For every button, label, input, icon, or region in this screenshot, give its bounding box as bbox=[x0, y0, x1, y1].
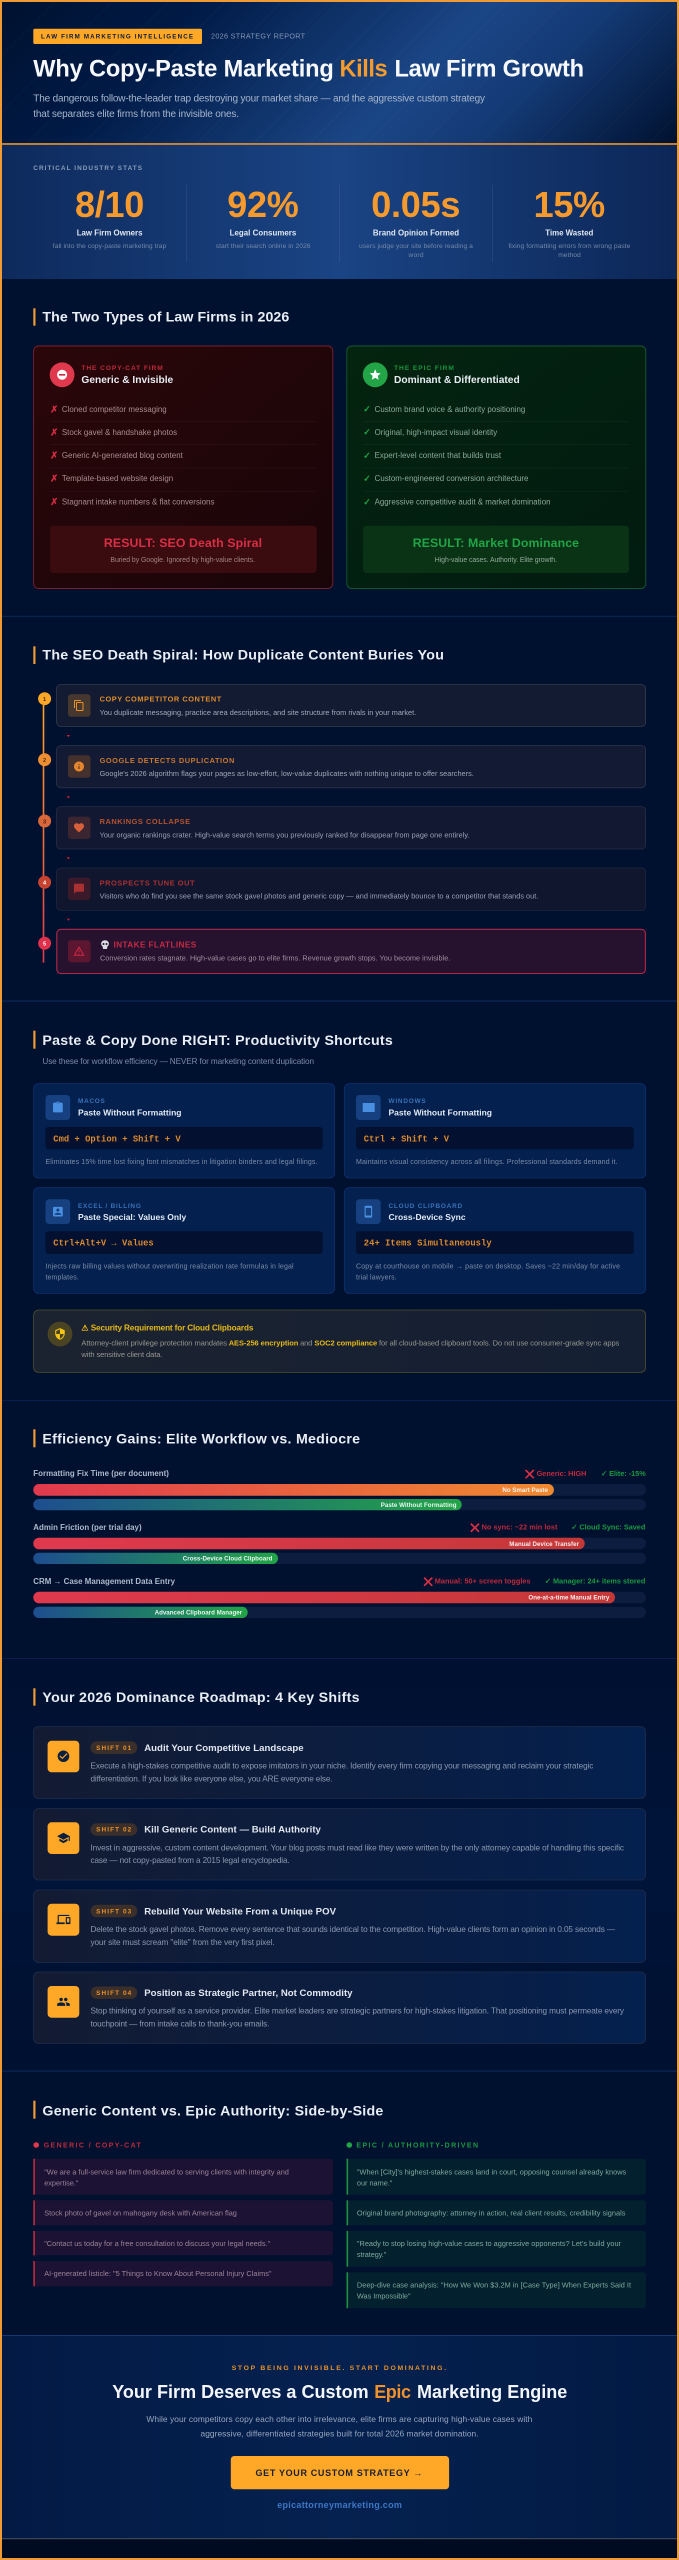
subtitle bbox=[33, 94, 485, 120]
bar chart: admin friction: ✓ Cloud Sync: Saved bbox=[571, 1523, 645, 1532]
stat: 0.05s bbox=[359, 184, 473, 259]
bar chart: crm entry: CRM → Case Management Data Entry bbox=[33, 1577, 176, 1586]
step marker 5 bbox=[38, 937, 51, 950]
epic copy examples: Original brand photography: attorney in action, real client results, credibility signals bbox=[357, 2208, 626, 2217]
bar chart: formatting fix: ✓ Elite: -15% bbox=[601, 1469, 646, 1478]
step 3: rankings collapse: RANKINGS COLLAPSE bbox=[100, 817, 190, 826]
heading: two types: The Two Types of Law Firms in 2026 bbox=[42, 310, 289, 326]
step 5: intake flatlines: INTAKE FLATLINES bbox=[114, 941, 197, 950]
section note: Use these for workflow efficiency — NEVER for marketing content duplication bbox=[42, 1057, 314, 1066]
shift 02: Invest in aggressive, custom content development. Your blog posts must read like they were written by the only attorney capable of handling this specific bbox=[90, 1844, 624, 1852]
failure list: Stagnant intake numbers & flat conversions bbox=[62, 498, 214, 506]
panel: epic firm bbox=[347, 346, 646, 588]
icon: copy bbox=[74, 700, 84, 711]
strength list: ✓ bbox=[363, 497, 371, 507]
stat: 0.05s: 0.05s bbox=[371, 184, 460, 225]
title: Kills bbox=[340, 56, 388, 82]
bar chart: crm entry: One-at-a-time Manual Entry bbox=[528, 1595, 610, 1602]
icon: check circle bbox=[58, 1750, 69, 1762]
bar chart: crm entry bbox=[33, 1576, 646, 1618]
shift 03: Delete the stock gavel photos. Remove every sentence that sounds identical to the competition. High-value clients form an opinion in 0.05 seconds — bbox=[90, 1925, 616, 1934]
failure list bbox=[50, 404, 317, 508]
title bbox=[33, 56, 584, 82]
icon: star bbox=[363, 362, 388, 387]
card: macos: Cmd + Option + Shift + V bbox=[53, 1134, 181, 1144]
icon: clipboard bbox=[53, 1102, 63, 1112]
step 2: google detects: Google's 2026 algorithm flags your pages as low-effort, low-value duplicates with nothing unique to offer searchers. bbox=[100, 769, 474, 778]
strength list: ✓ bbox=[363, 474, 371, 484]
security callout: AES-256 encryption bbox=[229, 1338, 299, 1347]
stat: 15%: 15% bbox=[534, 184, 605, 225]
arrow bbox=[67, 735, 70, 737]
panel: copy-cat firm bbox=[34, 346, 333, 588]
security callout bbox=[34, 1310, 646, 1372]
column: generic bbox=[33, 2142, 333, 2286]
step marker 4 bbox=[38, 876, 51, 889]
timeline bbox=[38, 692, 51, 963]
card: cloud clipboard bbox=[344, 1188, 646, 1293]
epic copy examples: "When [City]'s highest-stakes cases land in court, opposing counsel already knows bbox=[357, 2167, 627, 2176]
epic copy examples: Deep-dive case analysis: "How We Won $3.2M in [Case Type] When Experts Said It bbox=[357, 2280, 631, 2289]
shift 04: SHIFT 04 bbox=[96, 1990, 132, 1997]
failure list: ✗ bbox=[50, 474, 58, 485]
icon: warning bbox=[74, 946, 84, 956]
stat: 8/10 bbox=[53, 184, 167, 250]
security callout: Attorney-client privilege protection mandates bbox=[81, 1338, 227, 1347]
shift 03: Rebuild Your Website From a Unique POV bbox=[144, 1906, 337, 1917]
card: windows: WINDOWS bbox=[388, 1098, 426, 1105]
security callout: SOC2 compliance bbox=[314, 1338, 377, 1347]
step 5: intake flatlines bbox=[57, 929, 645, 974]
column: epic: EPIC / AUTHORITY-DRIVEN bbox=[356, 2143, 478, 2150]
shift 01: differentiation. If you look like everyone else, you ARE everyone else. bbox=[90, 1774, 333, 1784]
step 4: prospects tune out: Visitors who do find you see the same stock gavel photos and generic copy — and immediately bounce to a competitor that stands out. bbox=[100, 891, 538, 900]
badge bbox=[33, 29, 202, 44]
icon: cross bbox=[424, 1578, 432, 1586]
result: SEO death spiral bbox=[50, 526, 317, 573]
icon: shield bbox=[48, 1322, 72, 1346]
stat: 0.05s: word bbox=[407, 252, 424, 259]
stat: 8/10: fall into the copy-paste marketing trap bbox=[53, 243, 167, 250]
result: SEO death spiral: RESULT: SEO Death Spiral bbox=[104, 536, 262, 550]
shift 04: Stop thinking of yourself as a service provider. Elite market leaders are strategic partners for high-stakes litigation. That positioning must permeate every bbox=[90, 2007, 625, 2016]
stat: 8/10: 8/10 bbox=[75, 184, 144, 225]
icon: skull bbox=[101, 940, 109, 949]
arrow bbox=[67, 919, 70, 921]
stat: 92%: Legal Consumers bbox=[230, 229, 297, 238]
eyebrow: STOP BEING INVISIBLE. START DOMINATING. bbox=[232, 2365, 446, 2372]
step 2: google detects: GOOGLE DETECTS DUPLICATION bbox=[100, 756, 234, 765]
button: GET YOUR CUSTOM STRATEGY → bbox=[256, 2468, 422, 2478]
arrow bbox=[67, 857, 70, 860]
heading: efficiency: Efficiency Gains: Elite Workflow vs. Mediocre bbox=[42, 1432, 360, 1448]
card: excel bbox=[34, 1188, 335, 1293]
security callout: and bbox=[300, 1338, 312, 1347]
step marker 2 bbox=[38, 753, 51, 766]
generic copy examples: expertise." bbox=[44, 2178, 79, 2188]
security callout: for all cloud-based clipboard tools. Do not use consumer-grade sync apps bbox=[379, 1338, 620, 1347]
icon: graduation cap bbox=[57, 1833, 70, 1843]
icon: window bbox=[363, 1103, 375, 1112]
strength list: Aggressive competitive audit & market domination bbox=[375, 498, 550, 506]
shift 01 bbox=[34, 1727, 646, 1798]
shift 03 bbox=[34, 1890, 646, 1962]
shift 02: SHIFT 02 bbox=[96, 1827, 132, 1834]
strength list: Custom brand voice & authority positioning bbox=[375, 405, 525, 414]
strength list bbox=[363, 404, 629, 507]
failure list: ✗ bbox=[50, 404, 58, 415]
firm label: THE COPY-CAT FIRM bbox=[81, 365, 163, 372]
step 1: copy competitor: COPY COMPETITOR CONTENT bbox=[100, 695, 222, 704]
result: SEO death spiral: Buried by Google. Ignored by high-value clients. bbox=[110, 557, 255, 564]
failure list: Cloned competitor messaging bbox=[62, 405, 167, 414]
failure list: Generic AI-generated blog content bbox=[62, 451, 184, 460]
card: macos: Eliminates 15% time lost fixing font mismatches in litigation binders and legal filings. bbox=[46, 1159, 318, 1166]
shift 01: Audit Your Competitive Landscape bbox=[144, 1743, 304, 1754]
epic copy examples: strategy." bbox=[357, 2250, 387, 2259]
step 4: prospects tune out bbox=[57, 868, 646, 910]
step marker 3: 3 bbox=[43, 819, 46, 825]
stat: 92%: 92% bbox=[227, 184, 299, 225]
step marker 3 bbox=[38, 814, 51, 828]
firm name: Dominant & Differentiated bbox=[394, 375, 520, 386]
card: excel: Ctrl+Alt+V → Values bbox=[53, 1238, 154, 1248]
icon: contact box bbox=[53, 1207, 63, 1217]
stat: 0.05s: users judge your site before reading a bbox=[359, 243, 473, 250]
failure list: Template-based website design bbox=[62, 474, 173, 483]
epic copy examples: our name." bbox=[357, 2178, 393, 2188]
generic copy examples bbox=[44, 2167, 289, 2278]
stat: 15%: method bbox=[558, 252, 581, 259]
icon: cross bbox=[526, 1470, 534, 1478]
strength list: Expert-level content that builds trust bbox=[375, 451, 502, 460]
bar chart: formatting fix bbox=[33, 1469, 646, 1510]
bar chart: formatting fix: No Smart Paste bbox=[502, 1487, 548, 1494]
stat: 0.05s: Brand Opinion Formed bbox=[373, 229, 459, 238]
generic copy examples: "Contact us today for a free consultation to discuss your legal needs." bbox=[44, 2239, 271, 2248]
hero header bbox=[0, 0, 679, 145]
firm name: Generic & Invisible bbox=[81, 375, 174, 386]
bar chart: crm entry: Advanced Clipboard Manager bbox=[155, 1610, 243, 1617]
website link: epicattorneymarketing.com bbox=[277, 2500, 402, 2510]
bar chart: crm entry: Manual: 50+ screen toggles bbox=[435, 1576, 530, 1585]
heading: side by side: Generic Content vs. Epic Authority: Side-by-Side bbox=[42, 2103, 383, 2119]
headline: Marketing Engine bbox=[417, 2382, 567, 2402]
headline bbox=[112, 2382, 567, 2402]
column: generic: GENERIC / COPY-CAT bbox=[44, 2143, 142, 2150]
security callout: ⚠ Security Requirement for Cloud Clipboards bbox=[81, 1324, 254, 1332]
failure list: Stock gavel & handshake photos bbox=[62, 428, 177, 437]
result: market dominance bbox=[363, 526, 629, 573]
shift 03: SHIFT 03 bbox=[96, 1908, 132, 1915]
icon: no entry bbox=[50, 362, 74, 387]
epic copy examples: "Ready to stop losing high-value cases to aggressive opponents? Let's build your bbox=[357, 2239, 622, 2248]
step 5: intake flatlines: Conversion rates stagnate. High-value cases go to elite firms. Revenue growth stops. You become invisible. bbox=[100, 953, 450, 962]
stat: 8/10: Law Firm Owners bbox=[77, 229, 143, 238]
security callout: with sensitive client data. bbox=[80, 1350, 162, 1359]
paragraph bbox=[146, 2414, 533, 2439]
subtitle: The dangerous follow-the-leader trap destroying your market share — and the aggressive custom strategy bbox=[33, 94, 485, 104]
heading: shortcuts bbox=[33, 1031, 393, 1066]
report tag: 2026 STRATEGY REPORT bbox=[211, 32, 306, 40]
bar chart: admin friction: Admin Friction (per trial day) bbox=[33, 1523, 142, 1532]
subtitle: that separates elite firms from the invisible ones. bbox=[33, 109, 239, 120]
heading: shortcuts: Paste & Copy Done RIGHT: Productivity Shortcuts bbox=[42, 1033, 393, 1049]
arrow bbox=[67, 796, 70, 798]
failure list: ✗ bbox=[50, 497, 58, 508]
headline: Epic bbox=[374, 2382, 411, 2402]
card: macos: Paste Without Formatting bbox=[78, 1108, 182, 1118]
icon: people bbox=[57, 1998, 70, 2006]
bar chart: admin friction: Manual Device Transfer bbox=[509, 1541, 580, 1548]
call to action bbox=[0, 2335, 679, 2539]
step marker 4: 4 bbox=[43, 881, 47, 887]
step marker 2: 2 bbox=[43, 758, 46, 764]
card: macos: MACOS bbox=[78, 1098, 106, 1105]
title: Why Copy-Paste Marketing bbox=[33, 56, 334, 82]
card: windows: Ctrl + Shift + V bbox=[364, 1134, 450, 1144]
card: cloud clipboard: Cross-Device Sync bbox=[388, 1212, 466, 1222]
card: cloud clipboard: Copy at courthouse on mobile → paste on desktop. Saves ~22 min/day for active bbox=[356, 1263, 620, 1270]
card: cloud clipboard: trial lawyers. bbox=[356, 1274, 397, 1282]
bar chart: crm entry: ✓ Manager: 24+ items stored bbox=[545, 1576, 645, 1585]
step 2: google detects bbox=[57, 746, 646, 788]
card: windows bbox=[344, 1084, 646, 1178]
step 1: copy competitor: You duplicate messaging, practice area descriptions, and site structure from rivals in your market. bbox=[100, 708, 416, 717]
icon: cross bbox=[471, 1524, 479, 1532]
bar chart: admin friction: Cross-Device Cloud Clipboard bbox=[183, 1556, 273, 1563]
stats band bbox=[0, 145, 679, 279]
step marker 5: 5 bbox=[43, 942, 46, 948]
roadmap background bbox=[0, 1658, 679, 2070]
footer strip bbox=[0, 2539, 679, 2560]
strength list: Original, high-impact visual identity bbox=[375, 428, 497, 437]
bar chart: formatting fix: Formatting Fix Time (per document) bbox=[33, 1469, 169, 1478]
stats heading: CRITICAL INDUSTRY STATS bbox=[33, 165, 143, 172]
shift 02: Kill Generic Content — Build Authority bbox=[144, 1825, 322, 1836]
paragraph: aggressive, differentiated strategies built for total 2026 market domination. bbox=[200, 2429, 479, 2439]
card: cloud clipboard: CLOUD CLIPBOARD bbox=[388, 1203, 462, 1210]
shift 02 bbox=[34, 1809, 646, 1880]
column: epic bbox=[346, 2142, 646, 2308]
strength list: ✓ bbox=[363, 404, 371, 414]
shift 04: touchpoint — from intake calls to thank-you emails. bbox=[90, 2020, 269, 2029]
icon: chat bubble bbox=[74, 884, 84, 894]
shift 04: Position as Strategic Partner, Not Commodity bbox=[144, 1988, 353, 1999]
strength list: ✓ bbox=[363, 427, 371, 437]
failure list: ✗ bbox=[50, 451, 58, 462]
generic copy examples: "We are a full-service law firm dedicated to serving clients with integrity and bbox=[44, 2167, 289, 2176]
heading: seo death spiral: The SEO Death Spiral: How Duplicate Content Buries You bbox=[42, 648, 444, 664]
shift 01: SHIFT 01 bbox=[96, 1745, 132, 1752]
headline: Your Firm Deserves a Custom bbox=[112, 2382, 369, 2402]
firm label: THE EPIC FIRM bbox=[394, 365, 454, 372]
card: macos bbox=[34, 1084, 335, 1178]
card: cloud clipboard: 24+ Items Simultaneously bbox=[364, 1238, 492, 1248]
step marker 1 bbox=[38, 692, 51, 705]
card: excel: Paste Special: Values Only bbox=[78, 1212, 186, 1222]
shift 02: case — not copy-pasted from a 2015 legal encyclopedia. bbox=[90, 1856, 290, 1865]
bar chart: formatting fix: Generic: HIGH bbox=[537, 1469, 586, 1478]
card: windows: Maintains visual consistency across all filings. Professional standards demand it. bbox=[356, 1159, 618, 1166]
step 3: rankings collapse bbox=[57, 807, 646, 849]
stat: 15% bbox=[508, 184, 631, 259]
strength list: ✓ bbox=[363, 450, 371, 460]
icon: devices bbox=[56, 1915, 70, 1924]
icon: info bbox=[74, 762, 84, 772]
generic copy examples: AI-generated listicle: "5 Things to Know About Personal Injury Claims" bbox=[44, 2269, 272, 2278]
strength list: Custom-engineered conversion architecture bbox=[375, 474, 529, 483]
stat: 15%: Time Wasted bbox=[545, 229, 593, 238]
card: windows: Paste Without Formatting bbox=[388, 1108, 492, 1118]
shift 03: your site must scream "elite" from the very first pixel. bbox=[90, 1938, 275, 1947]
title: Law Firm Growth bbox=[394, 56, 584, 82]
bar chart: formatting fix: Paste Without Formatting bbox=[381, 1502, 457, 1509]
stat: 92%: start their search online in 2026 bbox=[216, 243, 311, 250]
step marker 1: 1 bbox=[43, 697, 46, 703]
bar chart: admin friction: No sync: ~22 min lost bbox=[482, 1523, 558, 1532]
button bbox=[231, 2456, 449, 2489]
epic copy examples: Was Impossible" bbox=[357, 2291, 411, 2300]
result: market dominance: High-value cases. Authority. Elite growth. bbox=[435, 557, 557, 564]
step 1: copy competitor bbox=[57, 685, 646, 726]
card: excel: Injects raw billing values without overwriting realization rate formulas in legal bbox=[46, 1263, 294, 1270]
generic copy examples: Stock photo of gavel on mahogany desk with American flag bbox=[44, 2208, 237, 2217]
bar chart: admin friction bbox=[33, 1523, 646, 1564]
stat: 92% bbox=[216, 184, 311, 250]
icon: heart bbox=[74, 823, 84, 832]
result: market dominance: RESULT: Market Dominance bbox=[413, 536, 579, 550]
icon: phone bbox=[365, 1206, 372, 1218]
shift 01: Execute a high-stakes competitive audit to expose imitators in your niche. Identify every firm copying your messaging and reclaim your strategic bbox=[90, 1762, 593, 1770]
step 4: prospects tune out: PROSPECTS TUNE OUT bbox=[100, 878, 195, 888]
step 3: rankings collapse: Your organic rankings crater. High-value search terms you previously ranked for disappear from page one entirely. bbox=[100, 830, 469, 839]
paragraph: While your competitors copy each other into irrelevance, elite firms are capturing high-value cases with bbox=[146, 2414, 533, 2424]
epic copy examples bbox=[357, 2167, 631, 2300]
failure list: ✗ bbox=[50, 427, 58, 438]
card: excel: EXCEL / BILLING bbox=[78, 1203, 141, 1210]
heading: roadmap: Your 2026 Dominance Roadmap: 4 Key Shifts bbox=[42, 1690, 360, 1706]
stat: 15%: fixing formatting errors from wrong paste bbox=[508, 243, 631, 250]
badge: LAW FIRM MARKETING INTELLIGENCE bbox=[41, 33, 193, 40]
shift 04 bbox=[34, 1972, 646, 2043]
card: excel: templates. bbox=[46, 1274, 79, 1282]
